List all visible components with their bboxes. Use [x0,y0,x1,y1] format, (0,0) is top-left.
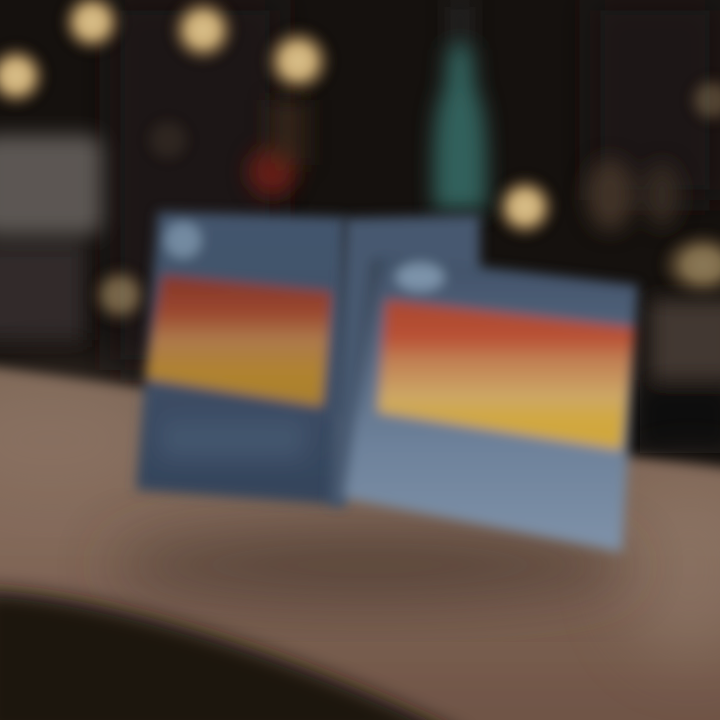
left grey object on shelf [0,135,102,340]
dark table edge at bottom left [0,590,470,720]
back card body [136,212,345,505]
front card [330,215,638,552]
front card highlight [396,263,444,291]
back card [136,212,345,505]
back card top highlight [165,222,201,258]
back card lower text block [160,420,305,460]
front card body [345,255,638,552]
wooden table [0,365,720,720]
red bottle and brown bottle [248,100,680,231]
teal bottle [433,0,487,210]
middle card panel [330,215,480,505]
front card colour stripes [378,300,635,450]
bokeh lights [0,0,720,327]
right-side dark cabinet [640,300,720,453]
back card colour stripes [145,275,332,406]
